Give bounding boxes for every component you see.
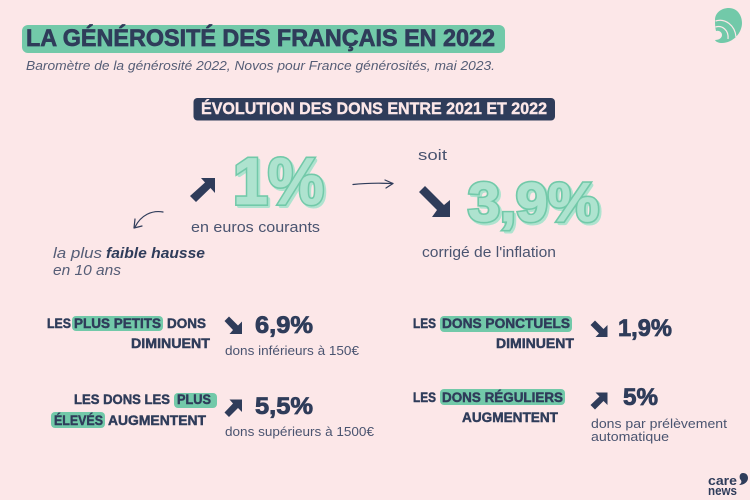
logo: care news xyxy=(708,473,748,498)
figure: 1%: 1% xyxy=(233,144,324,218)
label: AUGMENTENT xyxy=(108,413,207,428)
label: soit: soit xyxy=(418,147,448,164)
label: LES DONS LES xyxy=(74,392,170,407)
label: PLUS xyxy=(177,392,211,407)
note: lowest rise in 10 years xyxy=(53,245,205,279)
label: DONS PONCTUELS xyxy=(442,316,570,331)
icon: up arrow xyxy=(190,178,215,202)
label: LES xyxy=(413,390,436,405)
highlight xyxy=(440,316,572,332)
label: PLUS PETITS xyxy=(74,316,161,331)
title: LA GÉNÉROSITÉ DES FRANÇAIS EN 2022 xyxy=(26,24,495,52)
figure: 5,5% xyxy=(255,393,313,420)
icon: down arrow xyxy=(590,320,608,337)
note: lowest rise in 10 years: en 10 ans xyxy=(53,262,122,279)
label: LES xyxy=(47,316,71,331)
caption: en euros courants: en euros courants xyxy=(191,219,320,236)
icon: down arrow xyxy=(419,186,450,217)
logo: care news: news xyxy=(708,484,737,498)
label xyxy=(54,392,211,428)
caption: corrigé de l'inflation: corrigé de l'inflation xyxy=(422,244,556,261)
panel: dons ponctuels xyxy=(413,315,672,351)
note: lowest rise in 10 years: faible hausse xyxy=(106,245,205,262)
figure: 3,9%: 3,9% xyxy=(468,171,599,233)
panel: plus élevés xyxy=(51,392,375,439)
icon: top-right logo xyxy=(715,8,742,43)
panel: dons réguliers xyxy=(413,384,727,444)
label: DIMINUENT xyxy=(131,336,211,351)
figure: 1%: 1% xyxy=(235,146,326,220)
label: DONS RÉGULIERS xyxy=(442,390,563,405)
figure: 3,9%: 3,9% xyxy=(470,173,601,235)
caption: dons supérieurs à 1500€ xyxy=(225,424,375,439)
arrow: curved to note xyxy=(134,212,163,228)
panel: 3,9% corrected xyxy=(419,171,601,261)
highlight xyxy=(72,316,163,331)
caption: dons inférieurs à 150€ xyxy=(225,343,360,358)
highlight: plus xyxy=(174,393,217,408)
figure: 1%: 1% xyxy=(233,144,324,218)
panel: plus petits dons xyxy=(47,312,360,358)
icon: up arrow xyxy=(224,400,242,417)
figure: 6,9% xyxy=(255,312,313,339)
label: DIMINUENT xyxy=(496,336,575,351)
caption xyxy=(591,416,727,444)
highlight xyxy=(440,389,565,405)
icon: down arrow xyxy=(224,316,242,334)
label xyxy=(413,390,563,425)
highlight: élevés xyxy=(51,412,105,428)
label xyxy=(413,316,575,351)
logo: care news: care xyxy=(708,474,737,488)
caption: dons par prélèvement xyxy=(591,416,727,431)
panel: 1% rise xyxy=(190,144,326,236)
figure: 1,9% xyxy=(618,315,672,342)
icon: up arrow xyxy=(590,392,608,410)
section heading: ÉVOLUTION DES DONS ENTRE 2021 ET 2022 xyxy=(201,99,547,118)
figure: 3,9%: 3,9% xyxy=(468,171,599,233)
label: LES xyxy=(413,316,436,331)
label: AUGMENTENT xyxy=(462,410,559,425)
note: lowest rise in 10 years: la plus xyxy=(53,245,103,262)
subtitle: source: Baromètre de la générosité 2022, Novos pour France générosités, mai 2023. xyxy=(26,59,495,73)
label: DONS xyxy=(167,316,206,331)
figure: 5% xyxy=(623,384,658,411)
label: ÉLEVÉS xyxy=(54,413,103,428)
label xyxy=(47,316,211,351)
caption: automatique xyxy=(591,429,669,444)
arrow: to inflation figure xyxy=(353,180,393,188)
